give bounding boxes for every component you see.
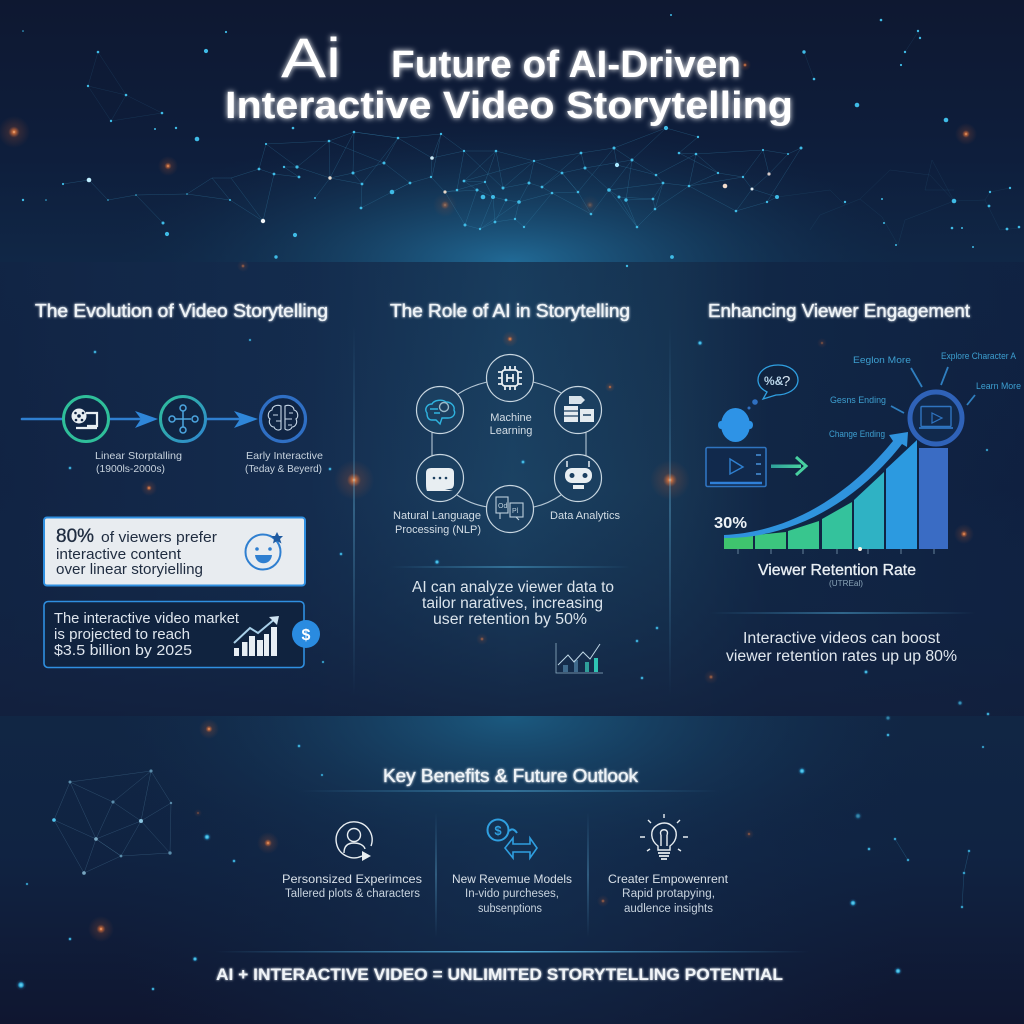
text: AI insight: user retention by 50% [433,611,587,628]
icon: money exchange: $ [494,823,502,838]
text: AI insight: tailor naratives, increasing [422,595,603,612]
panel: role of AI [390,301,630,673]
text: AI insight: AI can analyze viewer data to [412,579,614,596]
label: machine learning: Machine [490,412,532,424]
label: early interactive: Early Interactive [246,450,323,462]
benefit: creator empowerment: Rapid protapying, [622,888,715,900]
icon: document pair: Od [498,503,507,510]
icon: interactive screen [910,392,962,444]
choice labels: Explore Character A [941,351,1017,362]
choice labels: Learn More [976,381,1021,392]
text: AI insight [412,579,614,628]
heading: key benefits: Key Benefits & Future Outlook [383,766,639,786]
chart title: (UTREal) [829,579,863,588]
icon: branching node [160,396,206,442]
choice labels: Gesns Ending [830,395,886,406]
label: linear storytelling: (1900ls-2000s) [96,463,165,475]
title [225,26,793,127]
title line 1: Future of AI-Driven [391,44,741,86]
benefit: new revenue models: In-vido purcheses, [465,888,559,900]
network nodes and stars in the top band [22,14,1020,267]
scattered blue stars [16,338,990,992]
benefit: new revenue models: subsenptions [478,903,542,915]
callout: market projection: The interactive video market [54,610,240,627]
heading: role of AI: The Role of AI in Storytelling [390,301,630,321]
choice labels: Change Ending [829,429,885,440]
icon: brain gear [426,400,455,424]
label: NLP: Natural Language [393,510,481,522]
benefit: creator empowerment: audlence insights [624,903,713,915]
choice labels [829,351,1021,440]
icon: chip [498,366,522,390]
icon: dollar badge [292,620,320,648]
label: linear storytelling: Linear Storptalling [95,450,182,462]
icon: lightbulb [640,814,688,859]
icon: data documents [564,396,594,422]
icon: thought bubble: %& [764,374,784,388]
choice labels: Eeglon More [853,355,911,366]
callout: 80 percent of viewers: over linear storyielling [56,562,203,578]
icon: speech bubble [426,468,454,491]
title line 2: Interactive Video Storytelling [225,85,793,127]
retention bar chart [714,432,948,554]
benefit: new revenue models [452,820,572,915]
label: NLP: Processing (NLP) [395,524,481,536]
icon: person in circle [336,822,372,861]
icon: smiley [246,532,283,570]
icon: mini chart [556,643,603,673]
label: early interactive: (Teday & Beyerd) [245,463,322,475]
text: retention boost [726,630,957,665]
icon: viewer head [718,408,753,442]
icon: robot [565,461,592,489]
icon: document pair: Pl [512,508,519,515]
icon: video player [706,448,766,486]
constellation bottom left [52,770,172,875]
arrow: video to chart [771,457,806,475]
benefit: personalized experiences [282,822,422,900]
column dividers [354,325,670,695]
hub diagram [393,354,620,536]
choice rays [891,367,975,413]
benefit: personalized experiences: Personsized Experimces [282,872,422,886]
benefit: creator empowerment [608,814,729,915]
label: machine learning: Learning [490,425,532,437]
label: early interactive [245,450,323,475]
icon: growth chart [234,616,279,656]
label: machine learning [490,412,532,437]
benefit: creator empowerment: Creater Empowenrent [608,872,729,886]
heading: evolution: The Evolution of Video Storytelling [35,301,328,321]
icon: film reel [64,396,108,442]
value: 30 percent: 30% [714,515,747,532]
label: data analytics: Data Analytics [550,510,620,522]
text: retention boost: viewer retention rates up up 80% [726,648,957,665]
icon: thought bubble: ? [782,373,790,390]
logo: Ai: Ai [281,26,341,89]
benefit: new revenue models: New Revemue Models [452,872,572,886]
chart title: Viewer Retention Rate [758,562,916,579]
text: retention boost: Interactive videos can boost [743,630,941,647]
callout: market projection [44,602,320,668]
timeline [22,396,323,475]
icon: thought bubble [748,365,798,410]
panel: evolution of video storytelling [22,301,328,668]
icon: brain [260,396,306,442]
network mesh behind title [63,32,1020,245]
callout: market projection: is projected to reach [54,626,190,643]
arrow: growth curve [724,432,908,538]
callout: 80 percent of viewers: interactive content [56,547,181,563]
panel: viewer engagement [706,301,1021,665]
icon: document pair [496,497,523,520]
label: linear storytelling [95,450,182,475]
label: NLP [393,510,481,536]
icon: dollar badge: $ [302,627,311,644]
callout: market projection: $3.5 billion by 2025 [54,642,192,659]
callout: 80 percent of viewers: of viewers prefer [101,530,217,546]
callout: 80 percent of viewers: 80% [56,526,94,547]
heading: viewer engagement: Enhancing Viewer Engagement [708,301,970,321]
panel: key benefits and outlook [215,766,810,984]
tagline: AI + INTERACTIVE VIDEO = UNLIMITED STORYTELLING POTENTIAL [216,965,783,984]
chart title [758,562,916,588]
benefit: personalized experiences: Tallered plots & characters [285,888,420,900]
callout: 80 percent of viewers [44,518,305,586]
